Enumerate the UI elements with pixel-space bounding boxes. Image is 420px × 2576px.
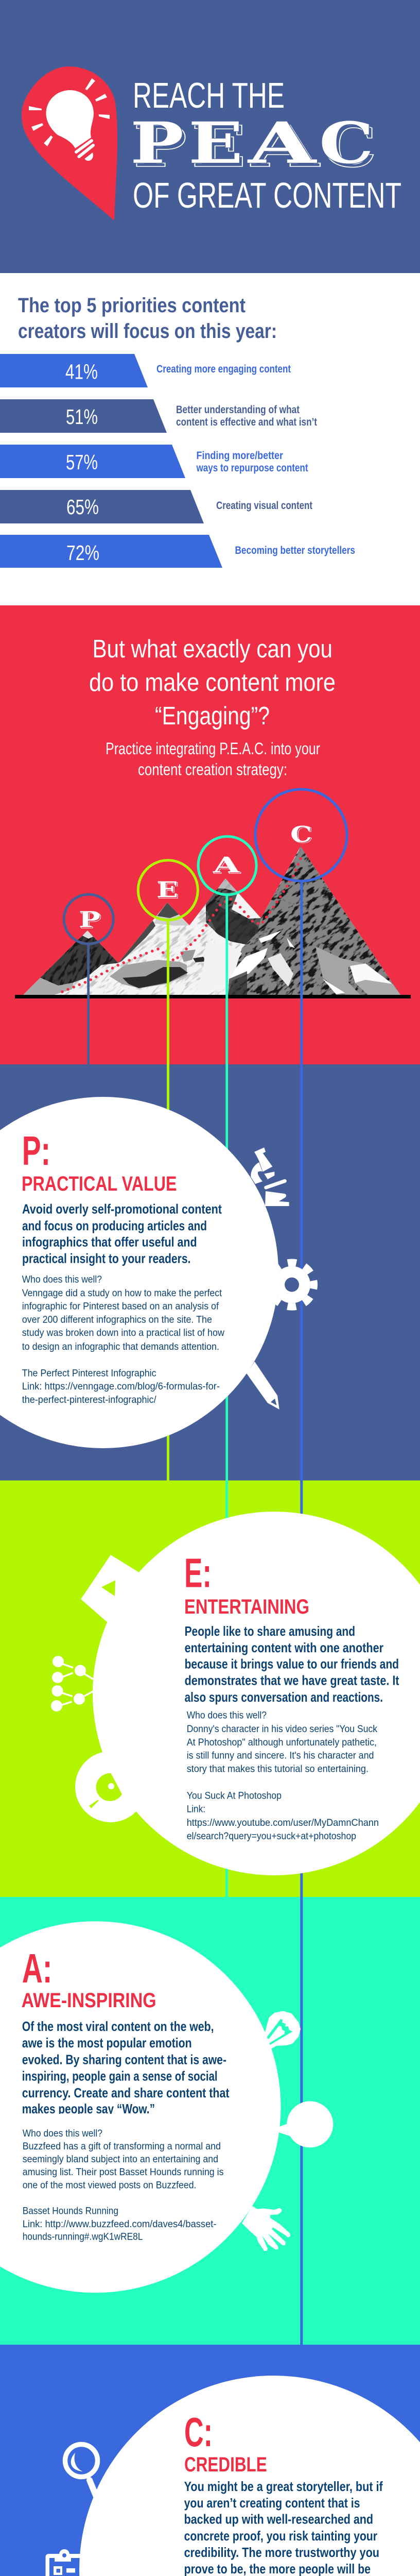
heading: what can you do: “Engaging”? (155, 702, 270, 730)
title: E (188, 110, 243, 176)
bar: 51%: 51% (66, 405, 98, 429)
panel: P practical value (0, 1064, 420, 1481)
heading: top 5 priorities: The top 5 priorities content (18, 294, 246, 317)
bar: 51% (0, 399, 317, 433)
E example text: Link: (187, 1803, 205, 1815)
P example text: over 200 different infographics on the site. The (22, 1314, 212, 1325)
A example text: Link: http://www.buzzfeed.com/daves4/basset- (23, 2218, 216, 2230)
A example text: Buzzfeed has a gift of transforming a normal and (23, 2141, 221, 2152)
circle P: P (80, 908, 101, 934)
panel: A awe-inspiring (0, 1897, 420, 2345)
panel: engaging intro and mountains (0, 605, 420, 1064)
E example text: el/search?query=you+suck+at+photoshop (187, 1831, 356, 1842)
A summary text: makes people say “Wow.” (22, 2101, 155, 2116)
A summary text: currency. Create and share content that (22, 2085, 230, 2100)
title: P (130, 110, 184, 176)
bar: 72%: 72% (66, 541, 99, 565)
A example text: seemingly bland subject into an entertaining and (23, 2154, 218, 2165)
white circle (93, 1512, 420, 1875)
bar: 41%: 41% (65, 360, 98, 383)
bar: 72%: Becoming better storytellers (235, 545, 355, 556)
letter C heading: CREDIBLE (184, 2453, 267, 2476)
circle A (198, 837, 256, 894)
circle A: A (213, 853, 241, 879)
E example text: https://www.youtube.com/user/MyDamnChann (187, 1817, 379, 1828)
P summary text: and focus on producing articles and (22, 1218, 207, 1233)
C summary text (184, 2479, 383, 2576)
P example text: the-perfect-pinterest-infographic/ (22, 1394, 156, 1405)
A example text: amusing list. Their post Basset Hounds running is (23, 2166, 224, 2178)
letter E heading: ENTERTAINING (184, 1596, 309, 1618)
icon: speech bubble (275, 2101, 333, 2147)
letter P heading: PRACTICAL VALUE (22, 1173, 177, 1195)
subheading: content creation strategy: (138, 760, 287, 779)
P example text: The Perfect Pinterest Infographic (22, 1367, 156, 1379)
bar: 65%: Creating visual content (216, 500, 312, 512)
icon: light bulb (265, 2011, 301, 2049)
heading: what can you do (89, 635, 336, 730)
C summary text: you aren’t creating content that is (184, 2495, 360, 2511)
A summary text: evoked. By sharing content that is awe- (22, 2052, 226, 2067)
E example text: Who does this well? (187, 1709, 267, 1721)
bar: 51%: Better understanding of what (176, 404, 300, 416)
P example text: Venngage did a study on how to make the perfect (22, 1287, 222, 1299)
title: C (319, 110, 374, 176)
C summary text: concrete proof, you risk tainting your (184, 2528, 377, 2544)
circle E (138, 860, 198, 920)
E example text: You Suck At Photoshop (187, 1790, 282, 1802)
icon: pencil (247, 1362, 279, 1410)
letter E heading: E: (184, 1550, 212, 1596)
title: C (322, 113, 377, 180)
circle P: P (79, 907, 100, 932)
E example text: story that makes this tutorial so entertaining. (187, 1763, 369, 1774)
E summary text: People like to share amusing and (185, 1623, 355, 1639)
E example text: Donny's character in his video series "You Suck (187, 1723, 377, 1735)
circle C (255, 789, 347, 881)
title: A (250, 113, 321, 180)
icon: share network (51, 1656, 95, 1711)
bar: 65%: 65% (66, 495, 99, 519)
A summary text: Of the most viral content on the web, (22, 2019, 214, 2034)
E summary text (185, 1623, 399, 1705)
white circle (0, 1097, 278, 1448)
panel: C credible (0, 2345, 420, 2576)
bar: 57%: Finding more/better (197, 450, 283, 462)
A example text (23, 2128, 224, 2242)
connector lines (87, 881, 303, 1064)
P example text: Who does this well? (22, 1274, 102, 1285)
A summary text: awe is the most popular emotion (22, 2035, 192, 2050)
bar: 51%: content is effective and what isn’t (176, 416, 317, 428)
A example text: Basset Hounds Running (23, 2205, 118, 2216)
icon: reaction face (75, 1751, 146, 1822)
heading: top 5 priorities (18, 294, 277, 343)
bar: 41% (0, 354, 291, 387)
bar: 65% (0, 490, 312, 523)
heading: what can you do: But what exactly can you (93, 635, 332, 663)
bar: 57% (0, 445, 308, 478)
icon: open hand (242, 2206, 290, 2251)
C summary text: credibility. The more trustworthy you (184, 2545, 379, 2560)
E summary text: entertaining content with one another (185, 1640, 383, 1655)
icon: red pin with light bulb (22, 66, 117, 221)
title: P (133, 113, 187, 180)
circle A: A (212, 852, 240, 877)
E example text (187, 1709, 379, 1842)
letter A heading: AWE-INSPIRING (22, 1989, 156, 2012)
title: REACH THE (133, 75, 285, 115)
P summary text: infographics that offer useful and (22, 1234, 197, 1250)
bar: 41%: Creating more engaging content (156, 363, 291, 375)
A summary text (22, 2019, 230, 2116)
icon: play sign (81, 1555, 144, 1623)
title: E (191, 113, 246, 180)
icon: microscope (251, 1147, 289, 1206)
ground line (15, 995, 411, 998)
heading: top 5 priorities: creators will focus on this year: (18, 320, 277, 343)
bar: 72% (0, 535, 355, 568)
letter A heading: A: (22, 1945, 52, 1991)
icon: magnifying glass (65, 2444, 99, 2503)
title: A (247, 110, 318, 176)
P example text: study was broken down into a practical list of how (22, 1327, 225, 1338)
bar: 57%: ways to repurpose content (196, 462, 308, 474)
P example text: infographic for Pinterest based on an analysis of (22, 1301, 219, 1312)
A example text: one of the most viewed posts on Buzzfeed. (23, 2180, 196, 2191)
C summary text: backed up with well-researched and (184, 2512, 373, 2527)
icon: gear (270, 1262, 314, 1307)
A summary text: inspiring, people gain a sense of social (22, 2069, 218, 2084)
letter A heading (22, 1945, 156, 2012)
circle E: E (156, 877, 178, 903)
E example text: is still funny and sincere. It's his character and (187, 1750, 374, 1761)
letter E heading (184, 1550, 309, 1618)
circle E: E (157, 878, 179, 904)
P example text (22, 1274, 225, 1405)
title (130, 75, 401, 215)
P summary text: Avoid overly self-promotional content (22, 1201, 222, 1217)
P summary text (22, 1201, 222, 1266)
subheading: Practice integrating P.E.A.C. into your (106, 739, 320, 758)
panel: header (0, 0, 420, 273)
E example text: At Photoshop" although unfortunately pathetic, (187, 1737, 377, 1748)
P example text: Link: https://venngage.com/blog/6-formulas-for- (22, 1381, 220, 1392)
circle C: C (291, 822, 313, 848)
heading: what can you do: do to make content more (89, 669, 336, 697)
A example text: Who does this well? (23, 2128, 102, 2139)
P example text: to design an infographic that demands attention. (22, 1341, 219, 1352)
panel: E entertaining (0, 1481, 420, 1897)
circle P (64, 894, 113, 944)
P summary text: practical insight to your readers. (22, 1251, 190, 1266)
white circle (79, 2376, 420, 2576)
C summary text: You might be a great storyteller, but if (184, 2479, 383, 2494)
letter C heading (184, 2409, 267, 2476)
panel: top 5 priorities (0, 273, 420, 605)
mountain range (23, 846, 400, 995)
icon: clipboard (45, 2549, 92, 2576)
dotted climbing path (62, 855, 302, 992)
circle C: C (290, 822, 312, 847)
white circle (0, 1921, 281, 2293)
letter C heading: C: (184, 2409, 213, 2455)
A example text: hounds-running#.wgK1wRE8L (23, 2231, 143, 2242)
subheading (106, 739, 320, 779)
letter P heading: P: (22, 1128, 50, 1174)
letter P heading (22, 1128, 177, 1195)
bar: 57%: 57% (66, 450, 98, 474)
